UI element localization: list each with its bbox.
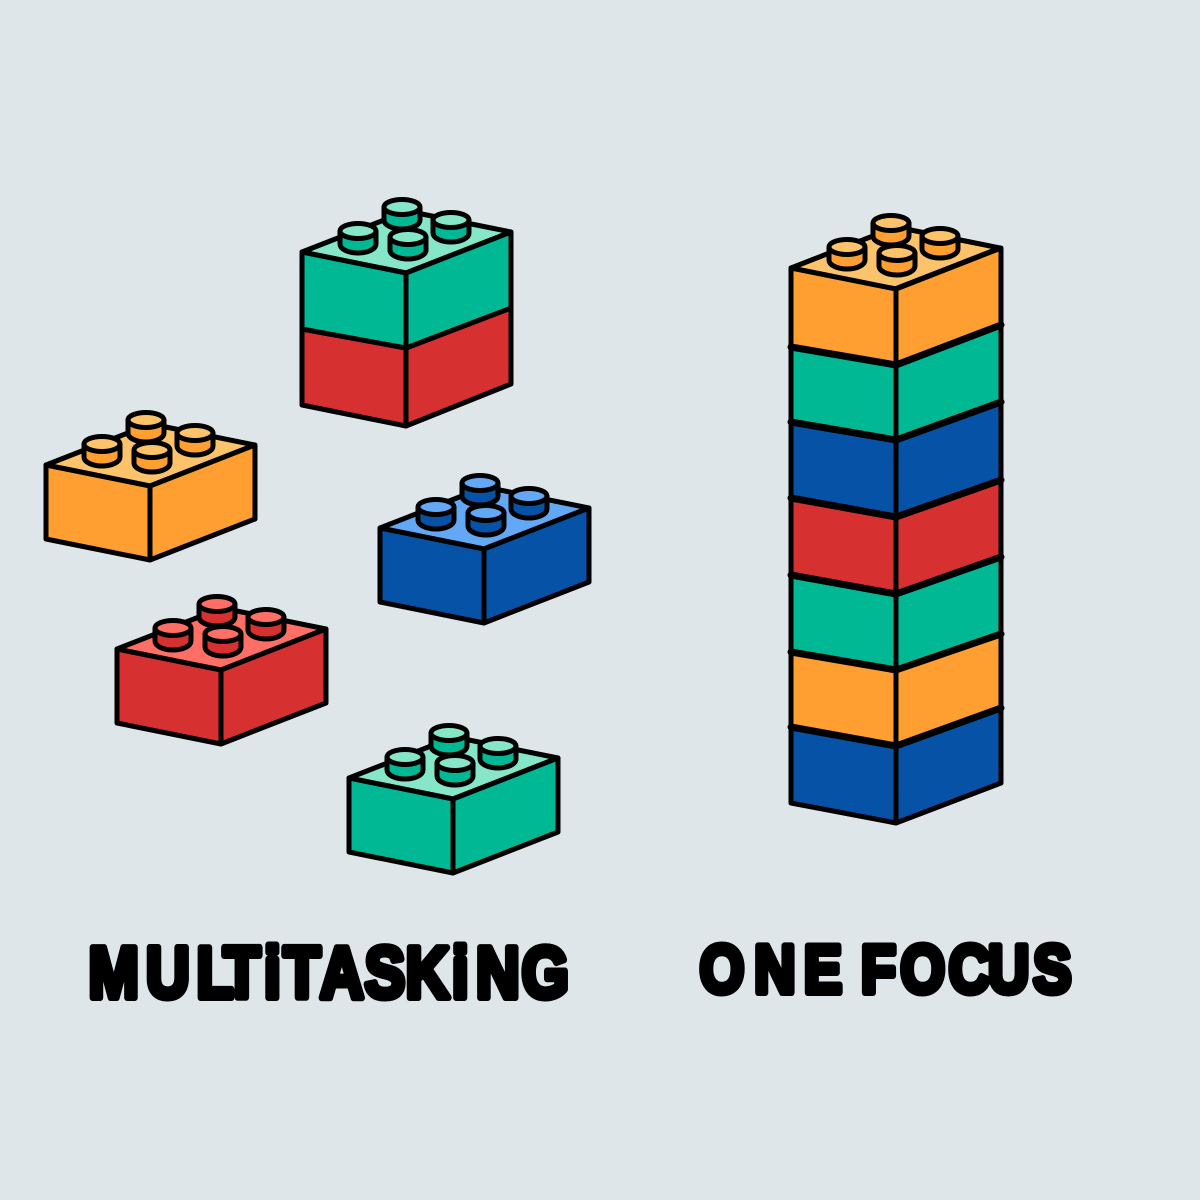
tower red brick [791,480,1001,594]
one focus tower [791,216,1001,823]
heading: one focus: ONE FOCUS [700,932,1071,1008]
blue brick [380,476,589,623]
tower orange top brick [791,216,1001,365]
tower blue brick [791,402,1001,517]
tower blue base brick [791,708,1001,823]
multitasking bricks [46,200,589,873]
heading: multitasking: MULTiTASKiNG [89,934,569,1014]
tower green upper brick [791,325,1001,440]
red lower brick [302,308,511,426]
red brick [117,596,326,744]
green upper brick [302,200,511,348]
stacked green and red bricks [302,200,511,426]
tower green brick [791,557,1001,670]
orange brick [46,412,255,560]
tower orange brick [791,634,1001,746]
green brick [349,726,558,873]
